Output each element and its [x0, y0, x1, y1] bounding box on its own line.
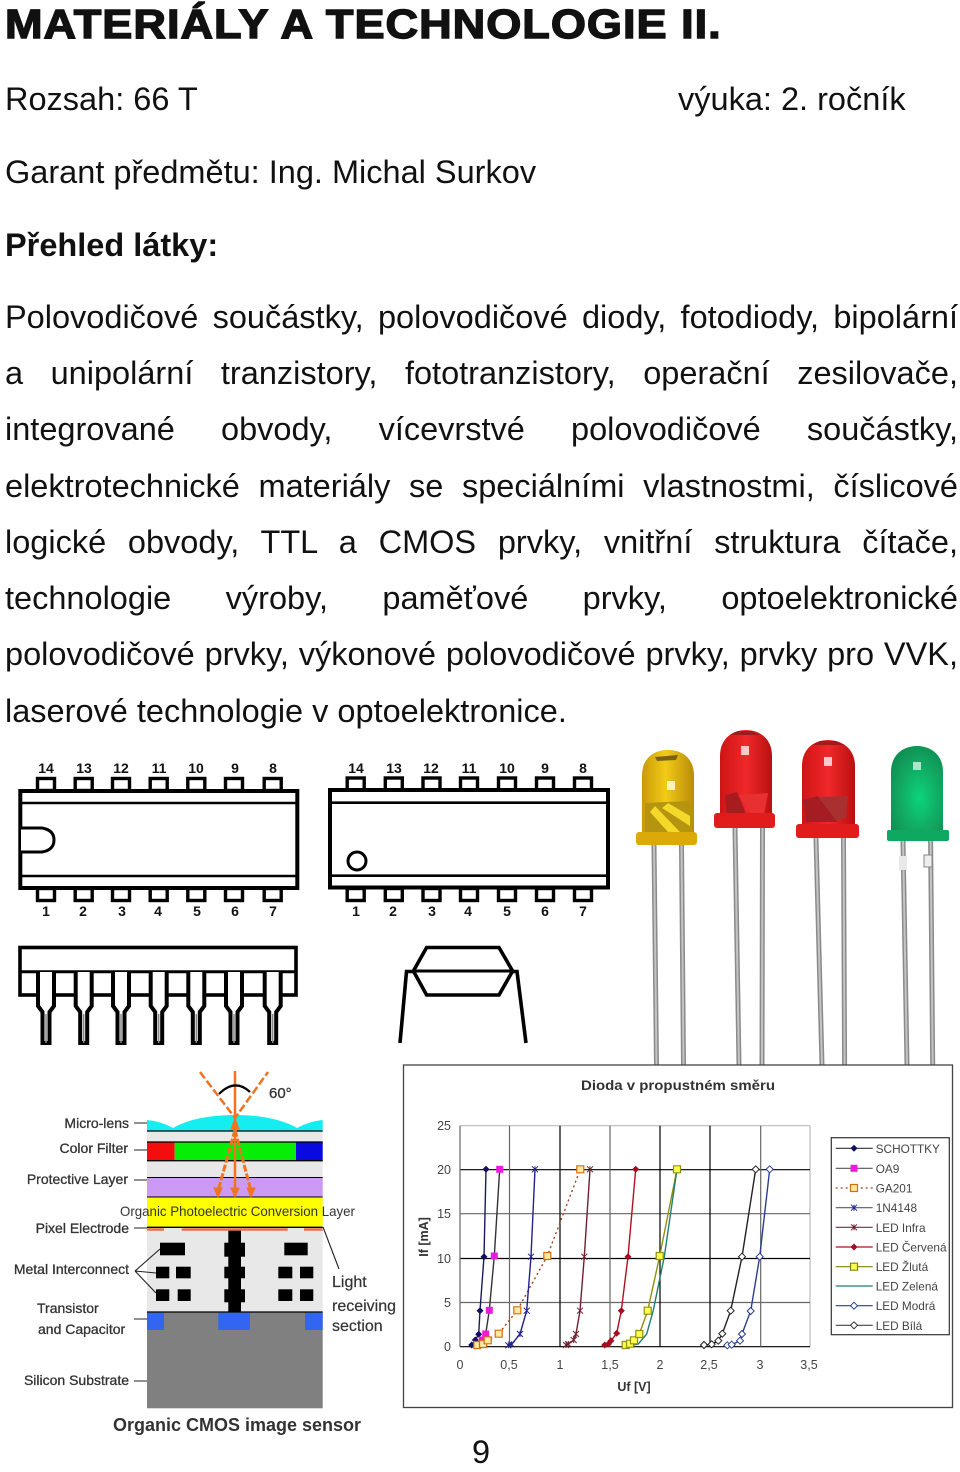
- photo: LED diodes: [636, 730, 949, 1065]
- y axis labels: 15: [437, 1207, 451, 1221]
- IC top view with notch: [20, 760, 298, 919]
- course guarantor: Garant předmětu: Ing. Michal Surkov: [5, 154, 536, 190]
- x axis title: Uf [V]: [617, 1380, 651, 1394]
- sensor labels: and Capacitor: [38, 1321, 126, 1337]
- light receiving section label: receiving: [332, 1298, 396, 1315]
- x axis labels: 3: [757, 1358, 764, 1372]
- legend: LED Červená: [876, 1240, 947, 1254]
- x axis labels: 2: [657, 1358, 664, 1372]
- legend: LED Zelená: [876, 1280, 938, 1294]
- legend: LED Bílá: [876, 1319, 923, 1333]
- IC top view with dot: 12: [423, 760, 439, 776]
- legend: GA201: [876, 1182, 912, 1196]
- organic CMOS image sensor diagram: [14, 1071, 396, 1435]
- chart title: Dioda v propustném směru: [581, 1077, 775, 1093]
- x axis labels: 2,5: [700, 1358, 718, 1372]
- IC top view with notch: 9: [231, 760, 239, 776]
- sensor labels: Color Filter: [60, 1140, 128, 1156]
- IC top view with notch: 13: [76, 760, 92, 776]
- IC top view with notch: 14: [38, 760, 54, 776]
- body paragraph: [5, 299, 958, 729]
- y axis title: If [mA]: [417, 1217, 431, 1257]
- legend: [831, 1138, 949, 1335]
- series curves: [472, 1169, 770, 1345]
- light receiving section label: [332, 1274, 396, 1335]
- x axis labels: 1: [557, 1358, 564, 1372]
- body paragraph: a unipolární tranzistory, fototranzistory, operační zesilovače,: [5, 355, 958, 391]
- leader lines: [134, 1123, 339, 1381]
- IC top view with notch: 4: [154, 903, 162, 919]
- legend: OA9: [876, 1162, 899, 1176]
- x axis labels: 1,5: [601, 1358, 619, 1372]
- IC top view with notch: 3: [118, 903, 126, 919]
- IC top view with dot: 9: [541, 760, 549, 776]
- sensor labels: Pixel Electrode: [36, 1220, 129, 1236]
- sensor labels: Metal Interconnect: [14, 1261, 129, 1277]
- IC top view with notch: 8: [269, 760, 277, 776]
- y axis labels: 25: [437, 1119, 451, 1133]
- conversion layer label: Organic Photoelectric Conversion Layer: [120, 1203, 355, 1219]
- body paragraph: elektrotechnické materiály se speciálními vlastnostmi, číslicové: [5, 468, 958, 504]
- IC top view with notch: 11: [152, 760, 167, 776]
- body paragraph: technologie výroby, paměťové prvky, optoelektronické: [5, 580, 958, 616]
- diode characteristic chart: [404, 1065, 952, 1408]
- x axis labels: [457, 1358, 818, 1372]
- IC top view with dot: 2: [389, 903, 397, 919]
- yellow LED: [636, 750, 697, 1065]
- IC top view with dot: 3: [428, 903, 436, 919]
- sensor labels: Transistor: [37, 1300, 99, 1316]
- green LED: [887, 746, 949, 1065]
- IC top view with notch: 5: [193, 903, 201, 919]
- IC top view with notch: 6: [231, 903, 239, 919]
- IC end view: [400, 948, 526, 1043]
- legend: LED Žlutá: [876, 1260, 929, 1274]
- scope: Rozsah: 66 T: [5, 81, 198, 117]
- legend: SCHOTTKY: [876, 1142, 940, 1156]
- IC top view with notch: 12: [113, 760, 129, 776]
- y axis labels: 0: [444, 1340, 451, 1354]
- light receiving section label: Light: [332, 1274, 367, 1291]
- IC top view with dot: 5: [503, 903, 511, 919]
- body paragraph: logické obvody, TTL a CMOS prvky, vnitřní struktura čítače,: [5, 524, 958, 560]
- light rays: [200, 1071, 268, 1197]
- gridlines: [460, 1126, 810, 1347]
- sensor layers: [147, 1115, 323, 1408]
- metal interconnect blocks: [156, 1231, 313, 1312]
- IC top view with dot: 4: [464, 903, 472, 919]
- y axis labels: 5: [444, 1296, 451, 1310]
- study year: výuka: 2. ročník: [678, 81, 906, 117]
- page number: 9: [472, 1434, 490, 1470]
- section heading: Přehled látky:: [5, 227, 218, 263]
- body paragraph: Polovodičové součástky, polovodičové diody, fotodiody, bipolární: [5, 299, 958, 335]
- IC top view with dot: 1: [352, 903, 360, 919]
- IC top view with dot: 14: [348, 760, 364, 776]
- angle label: 60°: [269, 1085, 292, 1102]
- sensor labels: Silicon Substrate: [24, 1372, 129, 1388]
- IC side view: [20, 948, 296, 1043]
- title: MATERIÁLY A TECHNOLOGIE II.: [5, 1, 722, 47]
- IC top view with notch: 1: [42, 903, 50, 919]
- light receiving section label: section: [332, 1318, 383, 1335]
- IC top view with dot: 10: [499, 760, 515, 776]
- sensor caption: Organic CMOS image sensor: [113, 1415, 361, 1435]
- y axis labels: [437, 1119, 451, 1354]
- IC top view with notch: 2: [79, 903, 87, 919]
- red LED left: [714, 730, 775, 1065]
- IC top view with dot: 11: [462, 760, 477, 776]
- y axis labels: 20: [437, 1163, 451, 1177]
- body paragraph: integrované obvody, vícevrstvé polovodičové součástky,: [5, 411, 958, 447]
- IC top view with dot: 7: [579, 903, 587, 919]
- series markers: [468, 1166, 773, 1349]
- sensor labels: Micro-lens: [64, 1115, 129, 1131]
- sensor labels: [14, 1115, 129, 1388]
- angle arc: [219, 1085, 250, 1094]
- red LED right: [796, 740, 859, 1065]
- legend: LED Infra: [876, 1221, 926, 1235]
- IC top view with dot: 13: [386, 760, 402, 776]
- IC top view with dot: [330, 760, 608, 919]
- legend: 1N4148: [876, 1201, 917, 1215]
- sensor labels: Protective Layer: [27, 1171, 128, 1187]
- IC top view with dot: 8: [579, 760, 587, 776]
- IC top view with notch: 7: [269, 903, 277, 919]
- body paragraph: polovodičové prvky, výkonové polovodičové prvky, prvky pro VVK,: [5, 636, 958, 672]
- IC top view with notch: 10: [188, 760, 204, 776]
- IC top view with dot: 6: [541, 903, 549, 919]
- x axis labels: 3,5: [800, 1358, 818, 1372]
- legend: LED Modrá: [876, 1299, 936, 1313]
- body paragraph: laserové technologie v optoelektronice.: [5, 693, 567, 729]
- x axis labels: 0,5: [500, 1358, 518, 1372]
- y axis labels: 10: [437, 1252, 451, 1266]
- x axis labels: 0: [457, 1358, 464, 1372]
